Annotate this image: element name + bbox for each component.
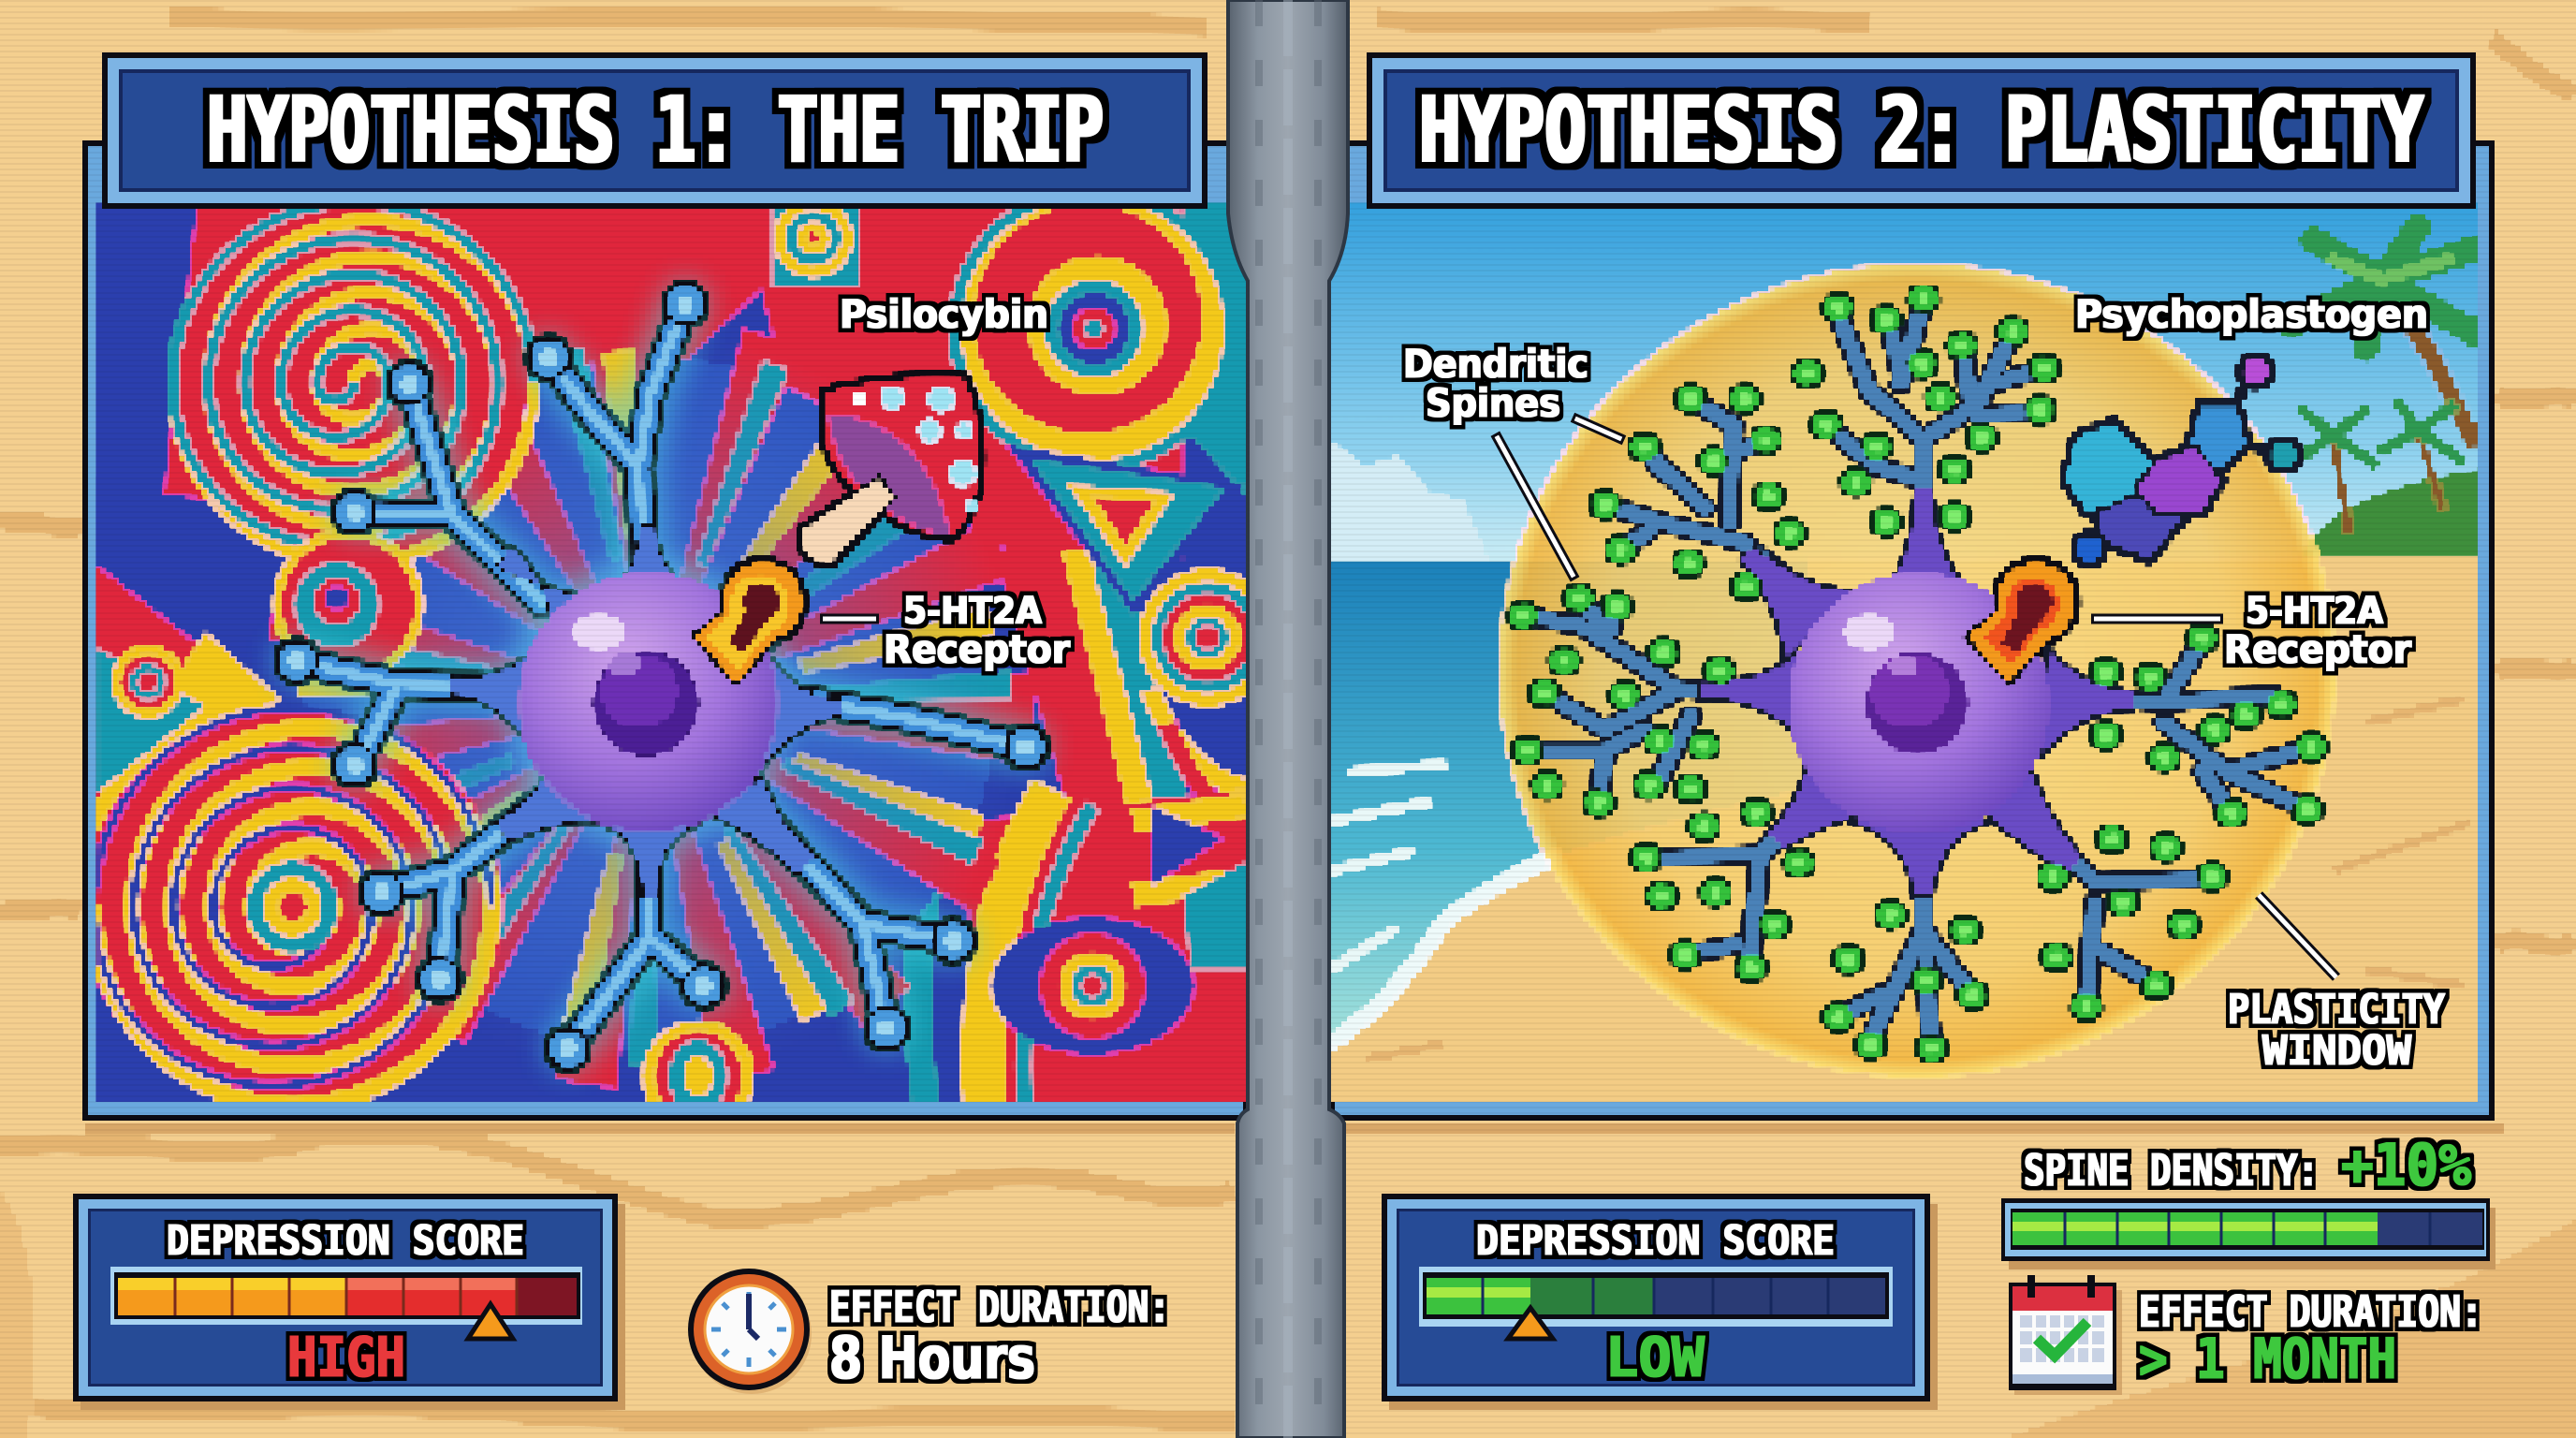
label: 5-HT2A receptor left xyxy=(884,590,1070,672)
label: dendritic spines: Spines xyxy=(1426,380,1560,426)
sub: soma xyxy=(449,524,842,899)
title banner 1 xyxy=(102,52,1208,209)
label: psychoplastogen: Psychoplastogen xyxy=(2075,291,2428,337)
label: dendritic spines xyxy=(1403,341,1588,426)
label: psilocybin: Psilocybin xyxy=(840,291,1048,337)
sub: eye bottom right xyxy=(990,917,1194,1055)
sub: pointer xyxy=(468,1304,513,1339)
sub: soma xyxy=(1790,574,2048,832)
text: effect duration 8 hours: EFFECT DURATION: xyxy=(829,1282,1170,1332)
label: plasticity window: WINDOW xyxy=(2262,1027,2411,1075)
panel: depression score high xyxy=(73,1194,625,1410)
leader: receptor left xyxy=(820,614,879,624)
sub: receptor keyhole xyxy=(1965,561,2077,685)
spine density bar xyxy=(2001,1198,2496,1269)
leader: receptor right xyxy=(2091,614,2223,624)
panel: hypothesis 2 frame xyxy=(1329,140,2495,1121)
sub: mushroom xyxy=(800,375,982,564)
plasticity window disk xyxy=(1499,263,2335,1078)
sub: pointer xyxy=(1508,1308,1553,1339)
icon: clock xyxy=(688,1269,812,1394)
panel: depression score low xyxy=(1382,1194,1938,1410)
sub: molecule xyxy=(2063,357,2298,564)
sub: spiral top left xyxy=(172,198,534,566)
sub: dendrites xyxy=(297,304,1026,1049)
text: effect duration 1 month xyxy=(2139,1286,2482,1392)
text: effect duration 1 month: EFFECT DURATION: xyxy=(2139,1286,2482,1337)
sub: value: LOW xyxy=(1605,1325,1705,1389)
panel: hypothesis 1 frame xyxy=(82,140,1249,1121)
central pillar xyxy=(1228,0,1348,1438)
title banner 2 xyxy=(1367,52,2476,209)
label: spine density: SPINE DENSITY: xyxy=(2024,1145,2319,1196)
label: dendritic spines: Dendritic xyxy=(1403,341,1588,387)
leader: plasticity window xyxy=(2259,895,2336,977)
icon: calendar xyxy=(2009,1275,2122,1395)
label: spine density xyxy=(2024,1131,2471,1199)
heading: hypothesis 1: HYPOTHESIS 1: THE TRIP xyxy=(207,78,1104,183)
neuron: hypothesis 1 xyxy=(297,304,1026,1049)
label: plasticity window xyxy=(2228,986,2445,1075)
sub: clouds xyxy=(1331,440,1486,559)
label: 5-HT2A receptor right xyxy=(2224,590,2411,672)
sub: heading: DEPRESSION SCORE xyxy=(1476,1217,1835,1265)
sub: spiral bottom left xyxy=(82,707,503,1108)
neuron: hypothesis 2 xyxy=(1524,300,2311,1049)
sub: heading: DEPRESSION SCORE xyxy=(167,1217,524,1265)
label: 5-HT2A receptor right: Receptor xyxy=(2224,626,2411,672)
sub: value: HIGH xyxy=(287,1325,405,1389)
label: plasticity window: PLASTICITY xyxy=(2228,986,2445,1034)
label: 5-HT2A receptor left: Receptor xyxy=(884,626,1070,672)
label: spine density: +10% xyxy=(2341,1131,2471,1199)
psychedelic background xyxy=(82,184,1277,1132)
sub: right column bands xyxy=(1027,542,1245,855)
sub: sea xyxy=(1331,559,1807,1043)
sub: receptor keyhole xyxy=(692,561,804,685)
sub: island and palms xyxy=(2291,227,2481,559)
leaders: dendritic spines xyxy=(1498,419,1619,575)
beach background xyxy=(1331,205,2481,1101)
label: 5-HT2A receptor right: 5-HT2A xyxy=(2246,590,2383,633)
sub: score bar xyxy=(1419,1267,1893,1327)
sub: central stripes xyxy=(279,333,1018,1073)
text: effect duration 8 hours: 8 Hours xyxy=(829,1324,1035,1392)
sub: lower right bands xyxy=(917,788,1245,1117)
sub: target top right xyxy=(948,184,1237,473)
text: effect duration 8 hours xyxy=(829,1282,1170,1392)
label: 5-HT2A receptor left: 5-HT2A xyxy=(903,590,1042,633)
sub: dendrites xyxy=(1524,300,2311,1049)
sub: score bar xyxy=(110,1267,582,1325)
text: effect duration 1 month: > 1 MONTH xyxy=(2139,1327,2396,1392)
